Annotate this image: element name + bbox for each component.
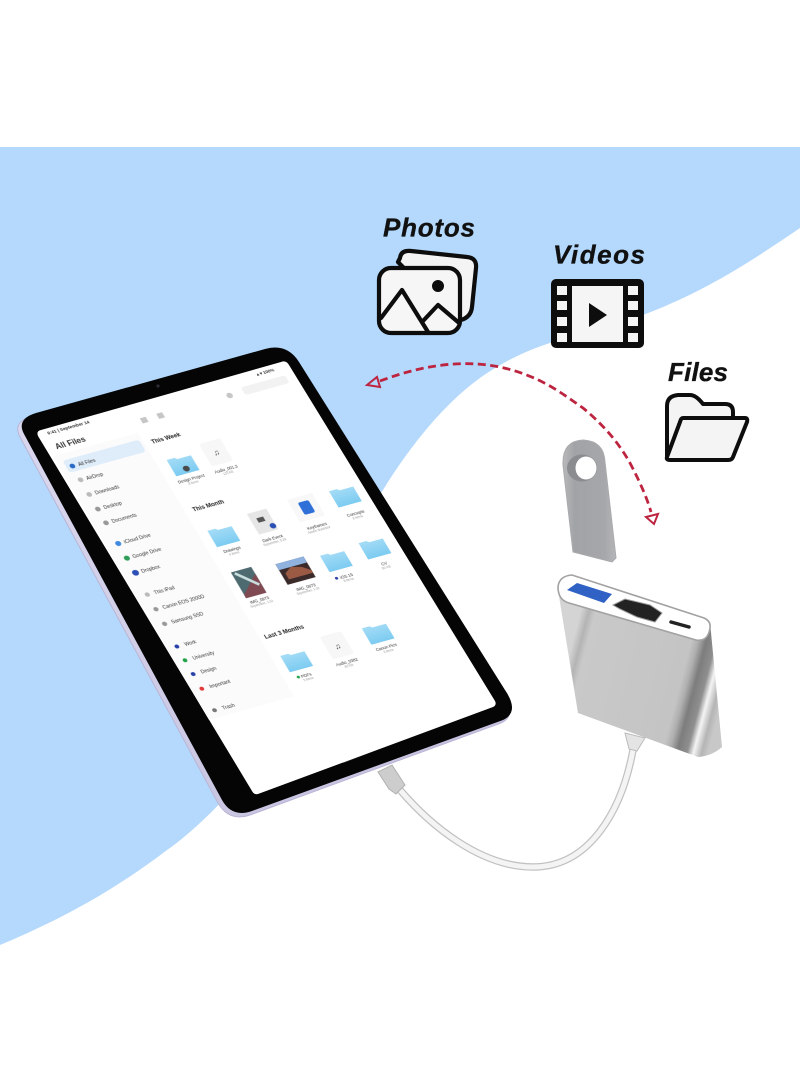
item: Design Project: [165, 453, 208, 488]
item: PDFs: [280, 650, 320, 684]
item: Audio 001: 120 KB: [222, 470, 234, 476]
item: photo 1: IMG_0973: [249, 595, 271, 605]
item: CV: [359, 537, 399, 572]
sidebar panel: [53, 433, 294, 720]
sidebar highlight row: [63, 440, 146, 473]
item: Canon Pics: Canon Pics: [375, 642, 398, 652]
item: blue app: Keyframes: [306, 521, 328, 531]
hub adapter: [558, 575, 722, 757]
sidebar list: Important: [209, 679, 233, 690]
item: Audio 001: Audio_001.3: [213, 464, 239, 474]
port: micro USB: [671, 622, 689, 627]
item: Audio 002: ♫: [332, 642, 343, 651]
sidebar list: Desktop: [103, 501, 124, 511]
tablet: lavender metal frame: [18, 351, 510, 817]
item: Drawings: Drawings: [222, 545, 242, 554]
heading: Files: Files: [668, 357, 728, 387]
item: iOS 15: iOS 15: [339, 572, 355, 580]
sidebar list: Google Drive: [132, 547, 163, 560]
item: blue app: [287, 493, 333, 535]
heading: Photos: Photos: [383, 212, 475, 242]
sidebar list: Design: [200, 666, 218, 675]
tablet: white screen: [37, 361, 496, 794]
sidebar list: Samsung SSD: [170, 611, 205, 625]
status icons: ▴ ▾ 100%: [254, 368, 275, 377]
USB flash drive: [563, 440, 616, 562]
port: HDMI: [613, 599, 662, 622]
item: CV: CV: [380, 561, 388, 567]
sidebar list: Downloads: [94, 484, 121, 496]
search pill: [241, 375, 290, 395]
item: Concepts: 8 items: [352, 514, 364, 520]
sidebar list: Canon EOS 2000D: [162, 594, 206, 611]
icon: video film strip: [551, 279, 644, 348]
item: Dark Event: [245, 508, 287, 547]
item: Audio 001: [198, 438, 241, 478]
section heading: This Week: This Week: [151, 432, 183, 446]
item: PDFs: PDFs: [300, 672, 313, 679]
item: photo 1: September, 1:32: [250, 599, 274, 609]
item: Design Project: Design Project: [177, 473, 206, 485]
item: PDFs: 5 items: [303, 676, 315, 682]
tablet: files app screen content: [39, 365, 451, 720]
item: Concepts: [329, 485, 370, 522]
sidebar list: AirDrop: [85, 472, 105, 482]
icon: open folder: [667, 395, 747, 460]
arrow: red dashed double-headed curve: [367, 364, 658, 524]
toolbar icons: [139, 392, 235, 424]
adapter: pigtail strain relief: [625, 733, 645, 751]
tablet: camera dot: [156, 384, 160, 388]
item: photo 2: September, 1:32: [296, 586, 321, 596]
icon: photos: [379, 251, 476, 333]
item: photo 2: [275, 556, 323, 597]
item: photo 1: [230, 566, 274, 609]
port: USB-A: [567, 583, 612, 603]
item: Concepts: Concepts: [346, 509, 365, 518]
item: Canon Pics: 3 items: [383, 648, 395, 654]
sidebar list: All Files: [77, 458, 98, 468]
adapter: white port face: [558, 575, 710, 640]
sidebar title: All Files: [53, 435, 88, 451]
item: Audio 001: ♫: [211, 448, 222, 457]
sidebar list: Dropbox: [140, 564, 162, 575]
tablet: black bezel: [22, 348, 512, 813]
item: CV: 80 KB: [381, 565, 392, 570]
sidebar list: Documents: [111, 513, 139, 525]
section heading: This Month: This Month: [192, 500, 226, 513]
background: blue swoosh: [0, 147, 800, 945]
sidebar list: University: [192, 650, 216, 662]
cable: USB-C lead: [400, 750, 633, 867]
sidebar list: Work: [184, 639, 198, 648]
sidebar list: iCloud Drive: [123, 533, 153, 545]
item: iOS 15: [320, 549, 360, 585]
item: Drawings: 4 items: [228, 550, 241, 557]
item: Drawings: [207, 524, 247, 558]
item: photo 2: IMG_0973: [295, 582, 317, 592]
item: Audio 002: 80 KB: [344, 663, 354, 669]
adapter: aluminium body: [558, 590, 722, 757]
heading: Videos: Videos: [553, 240, 645, 270]
plug: USB-C connector: [378, 765, 405, 794]
tablet: charging port slot: [343, 736, 410, 762]
item: blue app: Adobe Illustrator: [307, 525, 332, 535]
sidebar list: This iPad: [153, 585, 176, 596]
item: Dark Event: September, 5:28: [263, 537, 287, 547]
sidebar list: [67, 451, 266, 714]
section heading: Last 3 Months: Last 3 Months: [264, 625, 306, 641]
item: Audio 002: [319, 631, 362, 671]
sidebar list: Trash: [221, 703, 237, 712]
status bar: 9:41 | September 14: [46, 420, 91, 435]
item: iOS 15: 8 items: [343, 577, 355, 583]
item: Design Project: 8 items: [188, 479, 200, 486]
item: Audio 002: Audio_0382: [335, 657, 360, 667]
item: Dark Event: Dark Event: [261, 533, 285, 543]
item: Canon Pics: [362, 622, 401, 656]
tablet: [18, 348, 512, 817]
